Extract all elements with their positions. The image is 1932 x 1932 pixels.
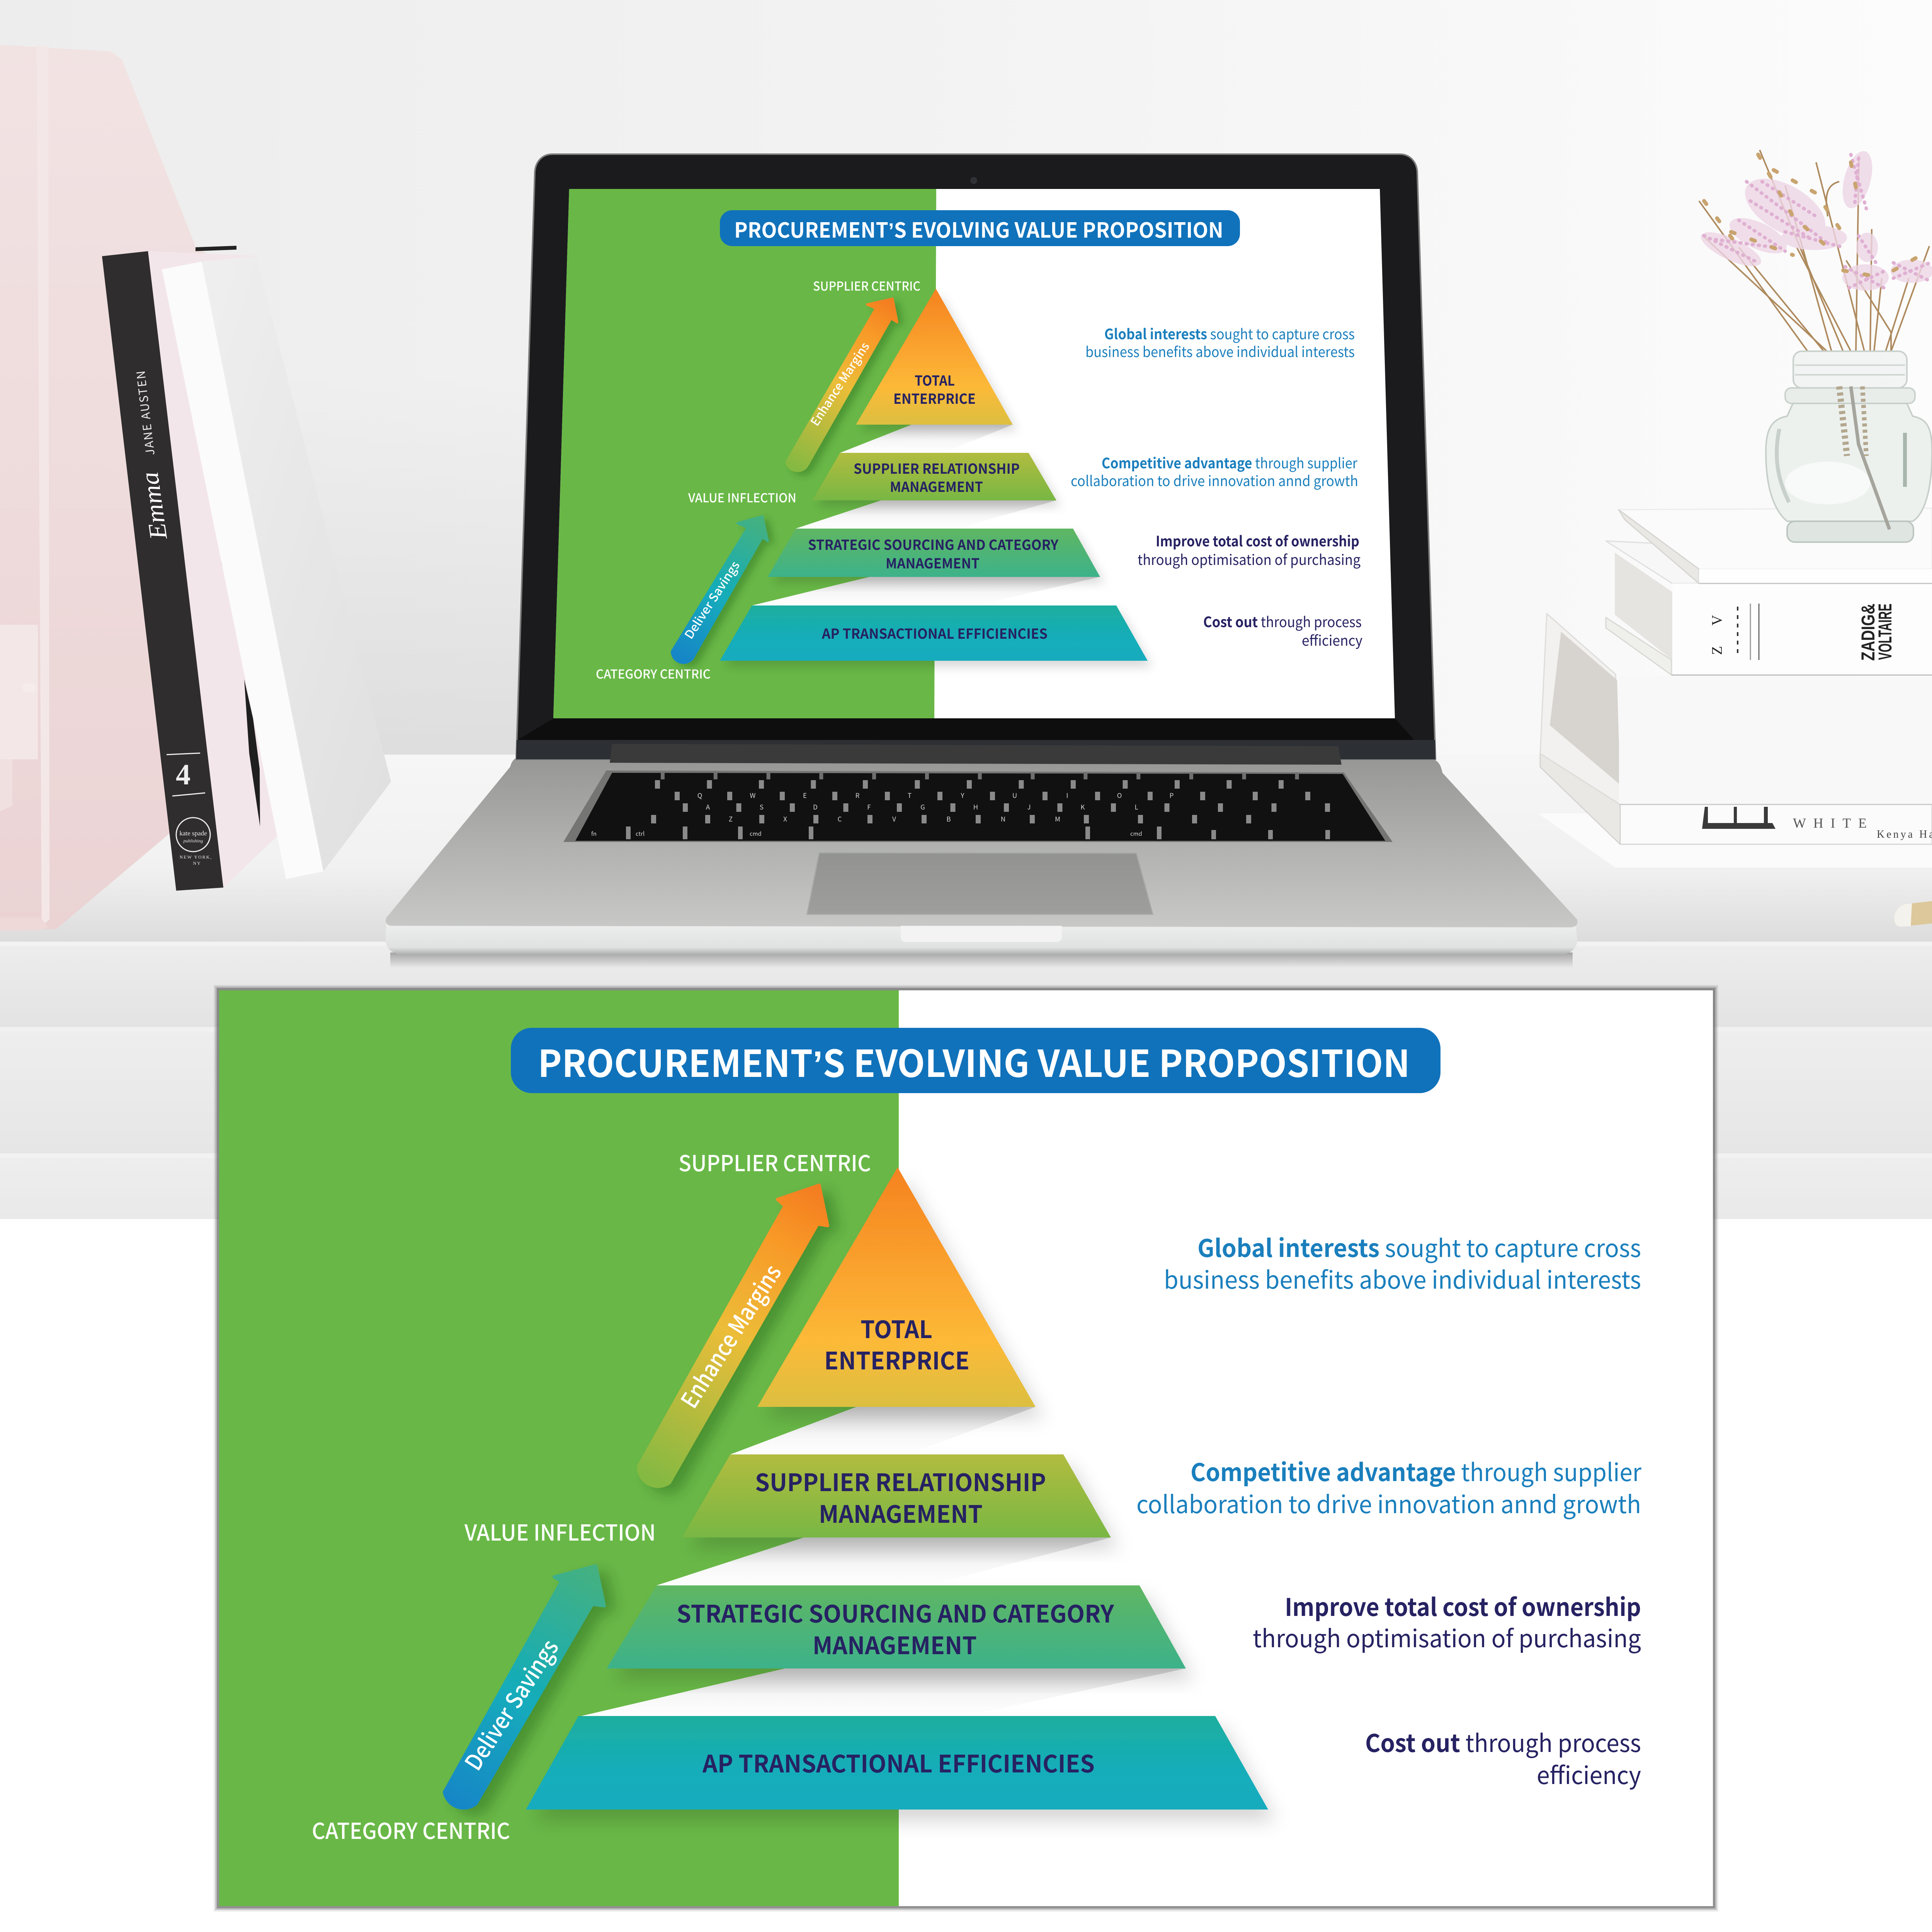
bottom book: White by Kenya Hara [1620, 804, 1932, 844]
axis labels: SUPPLIER CENTRIC [813, 277, 920, 294]
pencil on shelf [1894, 901, 1932, 927]
glass jar with dried pink flowers [1697, 148, 1932, 542]
keyboard: cmd [750, 830, 762, 838]
tier: supplier relationship management: MANAGEMENT [819, 1495, 983, 1530]
tier: strategic sourcing and category management [607, 1585, 1186, 1668]
tier: total enterprice: TOTAL [915, 370, 955, 390]
camera [970, 177, 977, 184]
keyboard: cmd [1130, 830, 1142, 838]
keyboard [563, 770, 1393, 842]
value statements [1136, 1229, 1642, 1791]
stack of white books: VOLTAIRE [1875, 604, 1896, 660]
stack of white books: WHITE [1793, 815, 1867, 831]
tier: supplier relationship management [812, 453, 1056, 500]
tier: total enterprice: ENTERPRICE [893, 388, 976, 408]
arrow: deliver savings [672, 516, 768, 663]
keyboard: ctrl [636, 830, 645, 838]
tier: total enterprice: TOTAL [861, 1310, 932, 1345]
panel shadow [219, 990, 1713, 1906]
laptop base shadow [390, 952, 1573, 968]
tier: strategic sourcing and category management [768, 529, 1100, 577]
axis labels [596, 277, 920, 682]
value statements: business benefits above individual interests [1085, 340, 1355, 361]
tier: supplier relationship management [682, 1454, 1111, 1537]
keyboard: ASDFGHJKL [706, 802, 1138, 811]
tier: supplier relationship management: SUPPLIER RELATIONSHIP [854, 458, 1020, 478]
statement: improve total cost [1253, 1588, 1641, 1655]
arrow: deliver savings: Deliver Savings [455, 1632, 565, 1776]
arrow: enhance margins: Enhance Margins [672, 1257, 788, 1414]
tier: total enterprice [856, 289, 1013, 425]
stack of white books [1540, 508, 1932, 844]
hinge [610, 744, 1342, 765]
tier: AP transactional efficiencies: AP TRANSACTIONAL EFFICIENCIES [702, 1745, 1095, 1779]
value statements: Global interests sought to capture cross [1104, 323, 1355, 344]
statement: cost out: Cost out through process [1365, 1724, 1641, 1759]
black book: Emma by Jane Austen: NY [193, 861, 201, 866]
value statements: efficiency [1302, 629, 1362, 650]
axis labels [312, 1146, 871, 1845]
stack of white books: ZADIG& [1858, 604, 1879, 661]
flower clusters [1697, 148, 1932, 291]
axis labels: CATEGORY CENTRIC [596, 665, 711, 682]
black book: Emma by Jane Austen [102, 246, 277, 891]
title bar: PROCUREMENT’S EVOLVING VALUE PROPOSITION [734, 213, 1223, 244]
title bar: PROCUREMENT’S EVOLVING VALUE PROPOSITION [538, 1034, 1410, 1088]
statement: competitive advantage: Competitive advantage through supplier [1190, 1453, 1642, 1488]
tier: strategic sourcing and category management: STRATEGIC SOURCING AND CATEGORY [808, 534, 1059, 554]
tier: supplier relationship management: SUPPLIER RELATIONSHIP [755, 1463, 1046, 1498]
statement: global interests [1164, 1229, 1641, 1296]
keyboard: QWERTYUIOP [697, 790, 1173, 800]
black book: Emma by Jane Austen: 4 [176, 759, 190, 791]
trackpad [807, 853, 1153, 914]
laptop deck [386, 757, 1578, 927]
laptop lid [516, 154, 1435, 759]
black book: Emma by Jane Austen: publishing [183, 838, 203, 844]
arrow: deliver savings: Deliver Savings [680, 557, 743, 642]
black book: Emma by Jane Austen: JANE AUSTEN [131, 370, 158, 456]
statement: improve total cost: through optimisation of purchasing [1253, 1619, 1641, 1655]
book pages and cover edge [148, 251, 277, 888]
keyboard: ZXCVBNM [729, 814, 1060, 823]
tier: strategic sourcing and category management: MANAGEMENT [813, 1626, 977, 1661]
statement: cost out: efficiency [1537, 1756, 1641, 1791]
book spine [102, 251, 223, 891]
arrow: enhance margins: Enhance Margins [806, 338, 873, 429]
arrow: enhance margins [638, 1185, 828, 1486]
screen: infographic on laptop [553, 189, 1395, 718]
stack of white books: Z V [1709, 607, 1725, 655]
statement: cost out [1365, 1724, 1641, 1791]
statement: competitive advantage: collaboration to drive innovation annd growth [1136, 1485, 1641, 1520]
black book: Emma by Jane Austen: kate spade [179, 830, 207, 837]
axis labels: SUPPLIER CENTRIC [679, 1146, 871, 1178]
value statements: Cost out through process [1203, 611, 1362, 631]
top book [1619, 508, 1932, 569]
black book: Emma by Jane Austen: NEW YORK, [180, 854, 212, 860]
value statements [1071, 323, 1362, 650]
tier: total enterprice: ENTERPRICE [824, 1342, 969, 1376]
statement: global interests: Global interests sought to capture cross [1197, 1229, 1641, 1264]
panel background [219, 990, 1713, 1906]
value statements: through optimisation of purchasing [1138, 548, 1361, 569]
value statements: collaboration to drive innovation annd growth [1071, 469, 1358, 490]
trackpad notch [901, 926, 1062, 942]
tier: supplier relationship management: MANAGEMENT [890, 476, 983, 496]
keyboard: fn [591, 830, 597, 838]
statement: global interests: business benefits above individual interests [1164, 1261, 1641, 1296]
laptop front edge [386, 924, 1577, 955]
axis labels: CATEGORY CENTRIC [312, 1814, 510, 1845]
statement: competitive advantage [1136, 1453, 1642, 1520]
axis labels: VALUE INFLECTION [464, 1515, 656, 1547]
pyramid wedges [840, 425, 1013, 453]
tier: strategic sourcing and category management: MANAGEMENT [886, 553, 980, 573]
screen background [553, 189, 1395, 718]
white book leaning [162, 256, 391, 879]
value statements: Competitive advantage through supplier [1102, 452, 1358, 473]
tier: strategic sourcing and category management: STRATEGIC SOURCING AND CATEGORY [677, 1595, 1114, 1629]
arrow: enhance margins [786, 299, 897, 471]
statement: improve total cost: Improve total cost of ownership [1285, 1588, 1641, 1623]
laptop [386, 154, 1578, 968]
tier: AP transactional efficiencies [526, 1716, 1268, 1810]
pyramid wedges [730, 1407, 1036, 1454]
stems [1699, 150, 1929, 351]
black book: Emma by Jane Austen: Emma [136, 470, 172, 542]
flower petals [1704, 155, 1930, 290]
tier: AP transactional efficiencies [720, 605, 1148, 661]
jar [1766, 351, 1932, 542]
lower panel: enlarged infographic [219, 990, 1713, 1906]
seed heads [1704, 155, 1928, 278]
tier: total enterprice [757, 1167, 1036, 1407]
arrow: deliver savings [444, 1566, 604, 1808]
pink magazine holder [0, 45, 232, 930]
second book: Zadig & Voltaire [1606, 541, 1932, 583]
tier: AP transactional efficiencies: AP TRANSACTIONAL EFFICIENCIES [821, 623, 1048, 643]
third book with worn pages [1540, 614, 1620, 804]
value statements: Improve total cost of ownership [1156, 530, 1359, 551]
axis labels: VALUE INFLECTION [688, 488, 796, 506]
